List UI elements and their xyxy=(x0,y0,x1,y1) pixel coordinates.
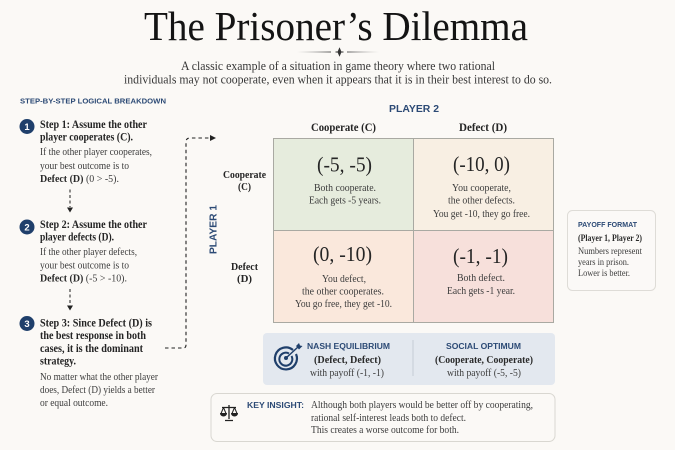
icon: target xyxy=(275,343,302,369)
step 1: 1 xyxy=(24,122,30,133)
row header: cooperate: Cooperate xyxy=(223,170,267,181)
arrow: step 2 to step 3 xyxy=(67,289,73,310)
subtitle xyxy=(124,58,552,86)
subtitle: A classic example of a situation in game theory where two rational xyxy=(181,58,495,73)
cell: cooperate / defect: You get -10, they go free. xyxy=(433,209,530,220)
cell: cooperate / defect: (-10, 0) xyxy=(453,152,510,176)
social optimum: (Cooperate, Cooperate) xyxy=(435,355,533,366)
nash equilibrium: NASH EQUILIBRIUM xyxy=(307,342,390,351)
cell: defect / defect xyxy=(414,230,554,322)
panel: payoff format: years in prison. xyxy=(578,257,629,267)
step 2: 2 xyxy=(24,222,30,234)
cell: cooperate / defect: the other defects. xyxy=(448,196,515,206)
step 2: player defects (D). xyxy=(40,232,114,244)
cell: cooperate / cooperate: Both cooperate. xyxy=(314,183,376,194)
insight text: rational self-interest leads both to defect. xyxy=(311,413,466,424)
cell: defect / cooperate: You go free, they get -10. xyxy=(295,299,392,310)
subtitle: individuals may not cooperate, even when it appears that it is in their best interest to do so. xyxy=(124,72,552,86)
step 3: Step 3: Since Defect (D) is xyxy=(40,318,153,330)
payoff matrix xyxy=(274,138,554,322)
heading: player 1: PLAYER 1 xyxy=(208,205,220,254)
cell: defect / defect: Each gets -1 year. xyxy=(447,286,515,297)
step 3: cases, it is the dominant xyxy=(40,343,143,355)
arrow: dominant strategy to matrix xyxy=(165,135,216,348)
cell: defect / cooperate xyxy=(274,230,414,322)
icon: scales xyxy=(220,405,238,420)
panel: step-by-step breakdown xyxy=(20,96,166,409)
breakdown heading: STEP-BY-STEP LOGICAL BREAKDOWN xyxy=(20,96,166,106)
step 3: the best response in both xyxy=(40,330,147,342)
panel: equilibrium comparison xyxy=(263,333,555,385)
cell: cooperate / cooperate xyxy=(274,138,414,230)
step 1: Step 1: Assume the other xyxy=(40,119,147,131)
step 1: your best outcome is to xyxy=(40,161,129,172)
step 3: does, Defect (D) yields a better xyxy=(40,385,156,396)
cell: cooperate / cooperate: (-5, -5) xyxy=(317,152,372,176)
panel: payoff format: PAYOFF FORMAT xyxy=(578,220,637,229)
nash equilibrium xyxy=(307,342,390,379)
nash equilibrium: with payoff (-1, -1) xyxy=(310,368,384,379)
cell: cooperate / defect: You cooperate, xyxy=(452,183,511,194)
heading: player 2: PLAYER 2 xyxy=(389,104,439,115)
cell: defect / cooperate: the other cooperates. xyxy=(302,286,384,298)
insight text xyxy=(311,400,533,436)
row header: cooperate: (C) xyxy=(238,182,251,193)
step 2: Step 2: Assume the other xyxy=(40,219,147,231)
column header: defect: Defect (D) xyxy=(459,122,507,134)
step 1 xyxy=(20,119,152,185)
panel: payoff format: Numbers represent xyxy=(578,246,642,256)
row header: defect: Defect xyxy=(231,262,259,273)
row header: defect: (D) xyxy=(237,274,252,285)
step 1: If the other player cooperates, xyxy=(40,147,152,158)
social optimum: SOCIAL OPTIMUM xyxy=(446,342,521,351)
panel: payoff format: (Player 1, Player 2) xyxy=(578,233,642,243)
step 2: Defect (D) (-5 > -10). xyxy=(40,274,127,284)
step 3: strategy. xyxy=(40,356,76,368)
row header: cooperate xyxy=(223,170,267,193)
panel: payoff format xyxy=(568,210,656,290)
step 3 xyxy=(20,316,159,409)
step 3: or equal outcome. xyxy=(40,398,108,409)
nash equilibrium: (Defect, Defect) xyxy=(314,355,381,366)
insight text: Although both players would be better off by cooperating, xyxy=(311,400,533,411)
social optimum: with payoff (-5, -5) xyxy=(447,368,521,379)
panel: payoff format: Lower is better. xyxy=(578,268,630,278)
insight text: This creates a worse outcome for both. xyxy=(311,425,459,436)
cell: defect / cooperate: You defect, xyxy=(322,274,366,285)
arrow: step 1 to step 2 xyxy=(67,190,73,212)
column header: cooperate: Cooperate (C) xyxy=(311,122,376,134)
row header: defect xyxy=(231,262,259,285)
step 2: If the other player defects, xyxy=(40,247,137,258)
cell: cooperate / defect xyxy=(414,138,554,230)
panel: key insight xyxy=(211,394,555,442)
step 2 xyxy=(20,219,147,284)
social optimum xyxy=(435,342,533,379)
step 3: 3 xyxy=(24,319,30,330)
cell: cooperate / cooperate: Each gets -5 years. xyxy=(309,196,381,206)
title ornament xyxy=(297,48,379,56)
insight label: KEY INSIGHT: xyxy=(247,401,304,410)
cell: defect / defect: (-1, -1) xyxy=(453,244,508,268)
step 3: No matter what the other player xyxy=(40,372,159,383)
step 1: player cooperates (C). xyxy=(40,132,133,144)
cell: defect / defect: Both defect. xyxy=(457,273,505,284)
cell: defect / cooperate: (0, -10) xyxy=(313,242,372,266)
step 2: your best outcome is to xyxy=(40,260,129,272)
title: The Prisoner’s Dilemma xyxy=(144,3,528,49)
step 1: Defect (D) (0 > -5). xyxy=(40,174,119,185)
